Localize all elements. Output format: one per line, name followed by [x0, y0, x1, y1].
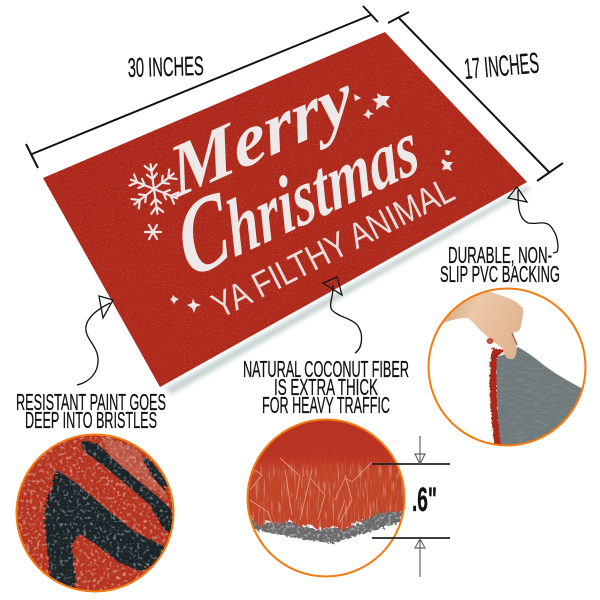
rubber backing	[245, 509, 402, 543]
panel: backing close-up circle	[428, 288, 586, 446]
fiber fringe	[243, 448, 409, 531]
finger crease	[512, 333, 517, 345]
arrow: paint callout	[77, 296, 113, 385]
thickness dimension: .6 inch	[372, 436, 450, 577]
panel: thickness close-up circle	[246, 418, 406, 578]
label: 30 inches: 30 INCHES	[127, 51, 204, 83]
callout text: resistant paint: RESISTANT PAINT GOES	[16, 389, 166, 415]
bottom arrow	[415, 539, 425, 577]
dimension: 17 inches	[388, 12, 563, 181]
arrow: backing callout	[508, 187, 558, 253]
mat text: Ya Filthy Animal: YA FILTHY ANIMAL	[205, 169, 461, 326]
red mat edge	[490, 348, 505, 446]
icon: small snow star	[145, 225, 161, 239]
arrow: coconut fiber callout	[323, 277, 362, 353]
hand	[443, 288, 523, 359]
callout text: coconut fiber: FOR HEAVY TRAFFIC	[262, 392, 390, 418]
doormat	[43, 32, 530, 394]
callout text: resistant paint: DEEP INTO BRISTLES	[25, 407, 157, 433]
callout text: coconut fiber: NATURAL COCONUT FIBER	[243, 356, 409, 382]
dimension: 30 inches	[26, 6, 378, 168]
label: .6 inch: .6"	[412, 481, 437, 519]
callout text: resistant paint	[16, 389, 166, 433]
icon: snowflake	[126, 161, 182, 217]
black paint chevron	[45, 470, 165, 590]
mat surface	[43, 32, 527, 387]
lighter painted patch	[100, 437, 168, 500]
pale stray fibers	[250, 458, 372, 530]
white area under backing	[240, 526, 410, 585]
black paint corner	[142, 456, 168, 490]
black paint upper band	[80, 441, 172, 535]
callout text: PVC backing	[440, 242, 560, 287]
panel: paint close-up circle	[16, 434, 174, 592]
callout text: coconut fiber	[243, 356, 409, 418]
grey backing	[497, 347, 583, 446]
pile blending band	[254, 446, 395, 470]
red fingertip	[486, 338, 494, 344]
callout text: coconut fiber: IS EXTRA THICK	[274, 374, 378, 400]
mat text: Christmas: Christmas	[167, 80, 427, 302]
top arrow	[415, 436, 425, 464]
icons: stars	[170, 93, 453, 313]
mat text: Merry: Merry	[161, 54, 359, 214]
